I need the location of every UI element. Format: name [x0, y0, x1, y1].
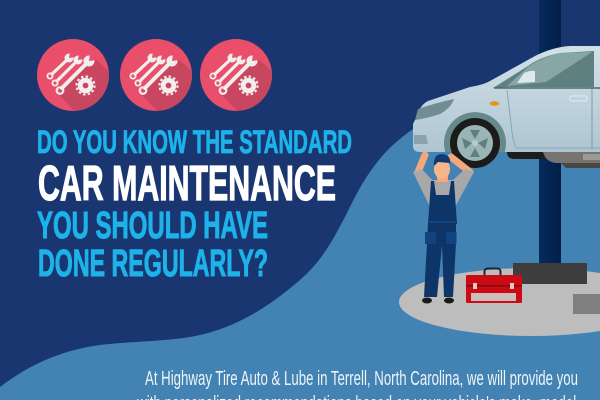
car headlight [415, 99, 454, 120]
mechanic shoes [422, 298, 454, 304]
mechanic forearms [418, 155, 470, 172]
wave: light blue background shape [0, 100, 600, 400]
mechanic overalls [424, 181, 457, 297]
lift: pole and base [513, 0, 600, 314]
floor ellipse [399, 268, 600, 336]
icon: wrench and gear badge 1 [37, 39, 113, 115]
icon: wrench and gear badge 3 [200, 39, 276, 115]
icon: wrench and gear badge 2 [120, 39, 196, 115]
car underside [507, 152, 600, 168]
wheel [444, 112, 506, 168]
title: CAR MAINTENANCE [38, 157, 336, 211]
mechanic [413, 154, 474, 304]
car body [413, 46, 600, 152]
title [37, 124, 352, 285]
toolbox [466, 268, 522, 303]
title: DONE REGULARLY? [38, 243, 268, 285]
mechanic sleeves [413, 169, 433, 207]
car on lift [413, 46, 600, 168]
title: YOU SHOULD HAVE [37, 205, 268, 247]
car door lines and handle [494, 87, 600, 150]
intro paragraph [136, 368, 580, 400]
title: DO YOU KNOW THE STANDARD [37, 124, 352, 160]
car windows [493, 51, 594, 88]
car turn signal [490, 101, 500, 106]
mechanic torso [431, 180, 454, 202]
car fog lamp [414, 135, 428, 144]
mechanic head [434, 154, 450, 182]
